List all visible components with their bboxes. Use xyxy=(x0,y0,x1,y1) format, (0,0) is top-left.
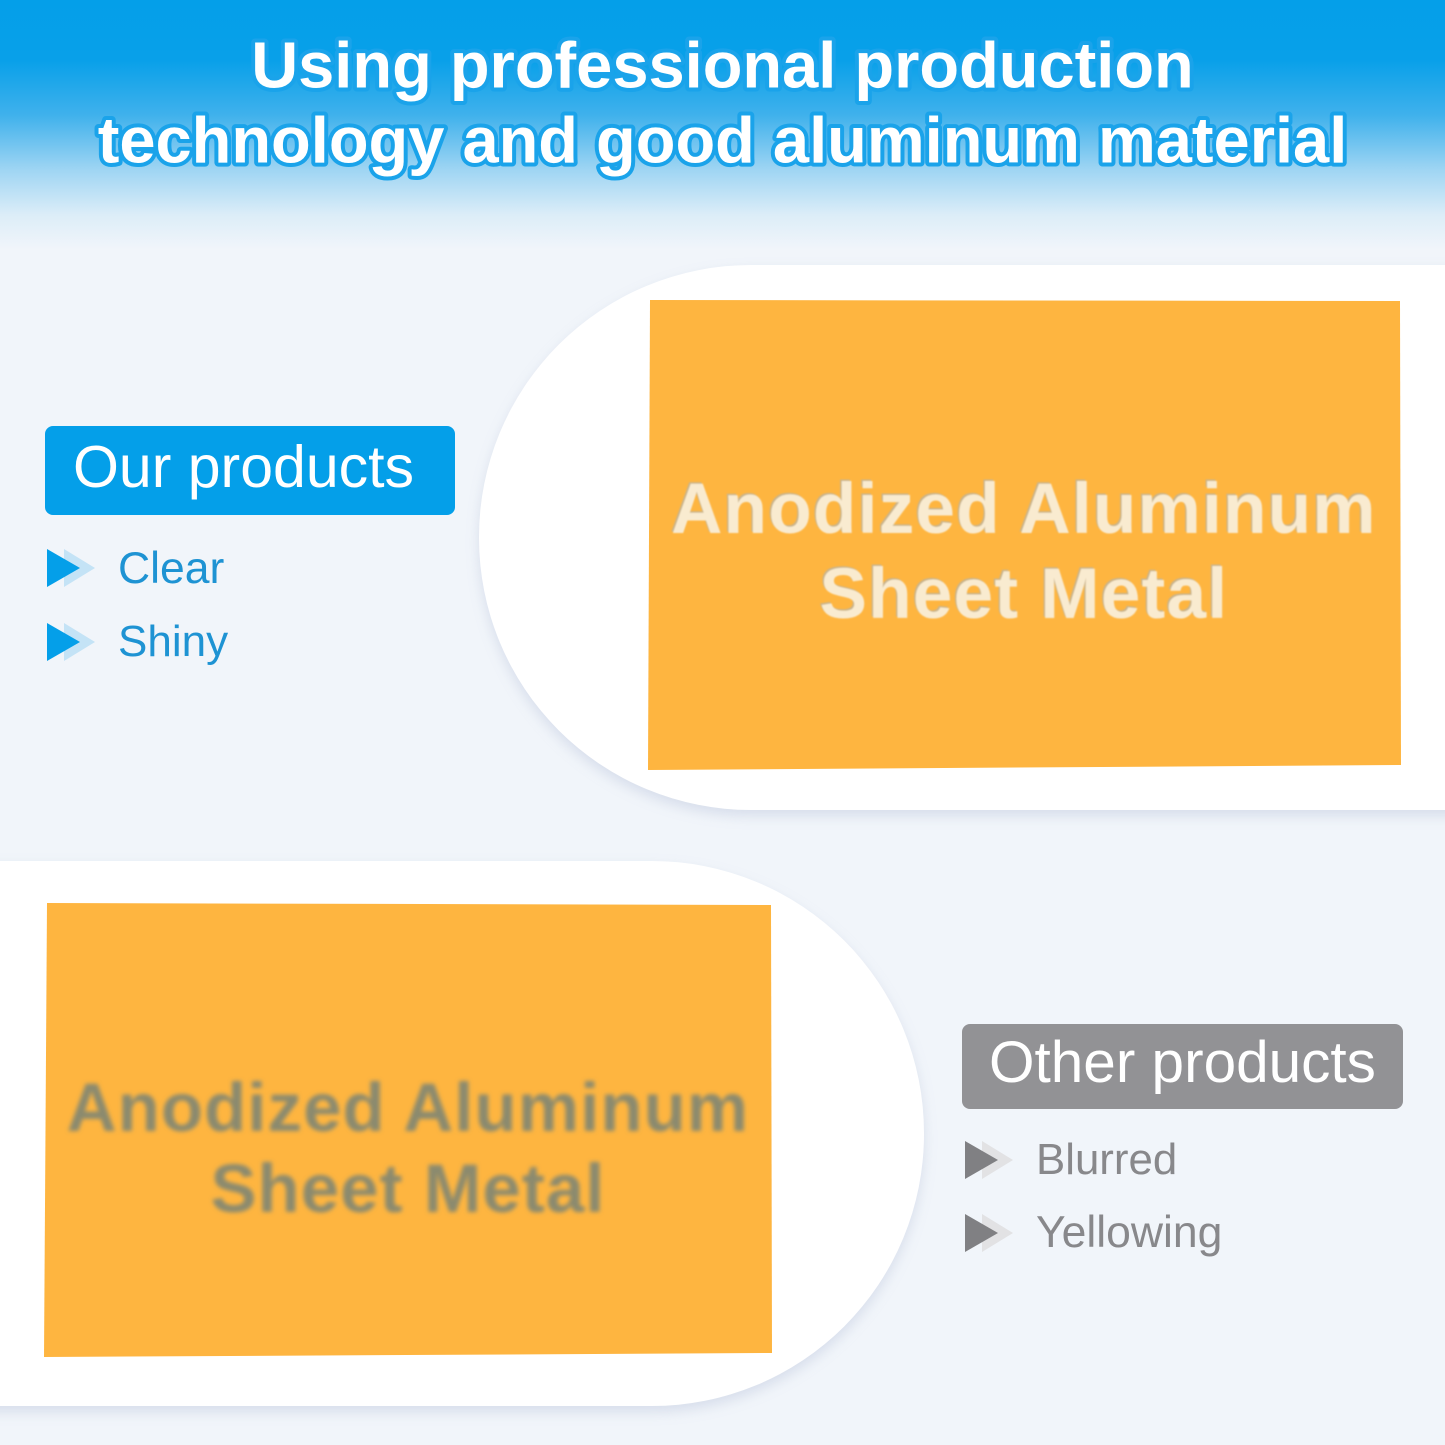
text: clear: Clear xyxy=(118,544,224,593)
product sheet: our product: Sheet Metal xyxy=(818,554,1227,632)
badge: other products xyxy=(962,1024,1403,1109)
product sheet: our product: Sheet Metal xyxy=(820,555,1228,634)
icon: arrow blurred xyxy=(965,1141,1012,1179)
badge: our products: Our products xyxy=(73,434,414,500)
text: shiny: Shiny xyxy=(118,617,228,666)
title: Using professional production xyxy=(251,28,1194,102)
product sheet: our product xyxy=(648,300,1401,770)
icon: arrow yellowing xyxy=(965,1214,1012,1252)
badge: our products xyxy=(45,426,455,515)
badge: other products: Other products xyxy=(989,1030,1376,1095)
panel: other products image card xyxy=(0,861,924,1406)
product sheet: other product: Sheet Metal xyxy=(210,1150,606,1227)
product sheet: other product: Anodized Aluminum xyxy=(67,1069,749,1146)
product sheet: other product xyxy=(44,903,772,1357)
list: our product benefits xyxy=(47,544,228,666)
title: technology and good aluminum material xyxy=(98,104,1347,176)
list: other product drawbacks xyxy=(965,1135,1222,1257)
panel: our products image card xyxy=(479,265,1445,810)
header gradient band xyxy=(0,0,1445,250)
icon: arrow clear xyxy=(47,549,95,587)
text: yellowing: Yellowing xyxy=(1036,1208,1222,1257)
icon: arrow shiny xyxy=(47,623,95,661)
title xyxy=(94,28,1347,180)
product sheet: our product: Anodized Aluminum xyxy=(671,470,1377,549)
product sheet: our product: Anodized Aluminum xyxy=(670,468,1375,548)
text: blurred: Blurred xyxy=(1036,1135,1177,1184)
